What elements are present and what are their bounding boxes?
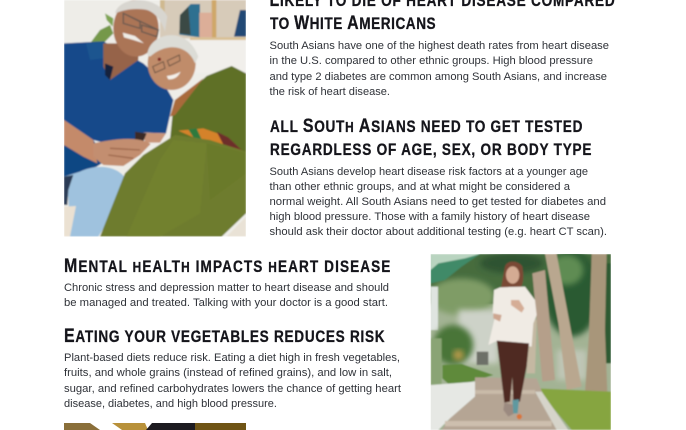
text: risk factors and testing: normal weight. All South Asians need to get tested for diabetes and <box>270 196 606 208</box>
heading: likely to die of heart disease: TO WHITE AMERICANS <box>270 12 436 33</box>
text: plant-based diets: fruits, and whole grains (instead of refined grains), and low in salt, <box>64 367 392 379</box>
text: plant-based diets: Plant-based diets reduce risk. Eating a diet high in fresh vegetables, <box>64 352 400 364</box>
heading: all South Asians need to get tested: REGARDLESS OF AGE, SEX, OR BODY TYPE <box>270 141 591 159</box>
text: stress and depression <box>64 282 389 309</box>
text: death rates: in the U.S. compared to other ethnic groups. High blood pressure <box>270 55 593 67</box>
photo: woman in hijab jogging on a tree-lined path <box>428 250 611 430</box>
text: risk factors and testing <box>270 166 607 238</box>
text: stress and depression: Chronic stress and depression matter to heart disease and should <box>64 282 389 294</box>
heading: all South Asians need to get tested: ALL SOUTH ASIANS NEED TO GET TESTED <box>270 115 582 136</box>
heading: all South Asians need to get tested <box>270 115 591 159</box>
man <box>64 0 173 237</box>
wall and shelf background <box>64 0 246 237</box>
text: plant-based diets <box>64 352 401 410</box>
text: plant-based diets: sugar, and refined carbohydrates lowers the chance of getting heart <box>64 383 401 395</box>
text: death rates: and type 2 diabetes are common among South Asians, and increase <box>270 71 607 83</box>
park background <box>428 250 611 430</box>
text: death rates: the risk of heart disease. <box>270 86 390 98</box>
text: plant-based diets: disease, diabetes, and high blood pressure. <box>64 398 277 410</box>
text: death rates <box>270 40 609 98</box>
photo: smiling older South Asian couple <box>64 0 246 237</box>
photo: cropped image at page bottom <box>64 423 246 430</box>
text: risk factors and testing: should ask their doctor about additional testing (e.g. heart CT scan). <box>270 226 607 238</box>
runner <box>488 262 537 419</box>
woman in green sari <box>93 35 246 237</box>
text: risk factors and testing: high blood pressure. Those with a family history of heart disease <box>270 211 590 223</box>
heading: mental health: MENTAL HEALTH IMPACTS HEART DISEASE <box>64 255 390 276</box>
text: risk factors and testing: than other ethnic groups, and at what might be considered a <box>270 181 571 193</box>
text: death rates: South Asians have one of the highest death rates from heart disease <box>270 40 609 52</box>
heading: eating vegetables: EATING YOUR VEGETABLES REDUCES RISK <box>64 325 385 346</box>
heading: likely to die of heart disease <box>270 0 615 33</box>
text: risk factors and testing: South Asians develop heart disease risk factors at a younger age <box>270 166 588 178</box>
text: stress and depression: be managed and treated. Talking with your doctor is a good start. <box>64 297 388 309</box>
